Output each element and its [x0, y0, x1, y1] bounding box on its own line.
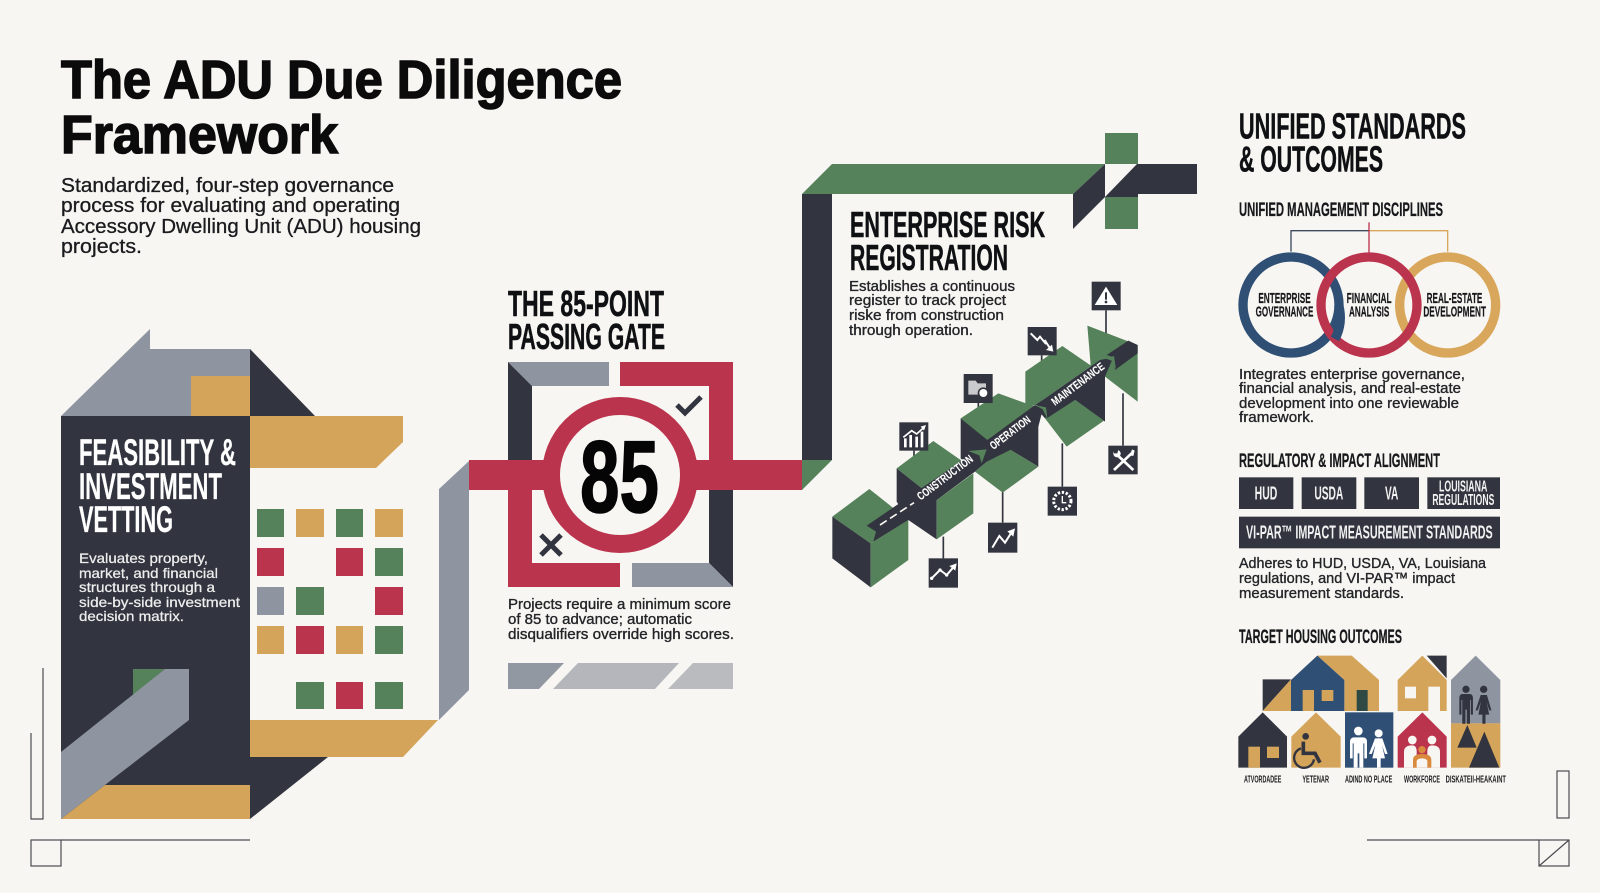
stems [914, 310, 1123, 558]
icon: folder search [964, 374, 993, 403]
end arrow [1087, 326, 1138, 402]
icon: check mark [677, 397, 701, 413]
enterprise description: register to track project [849, 292, 1007, 309]
venn diagram: management disciplines: GOVERNANCE [1256, 304, 1313, 320]
ribbon frame [802, 133, 1197, 460]
timeline ribbon: MAINTENANCE [1050, 361, 1107, 408]
step cube 3 [961, 393, 1038, 493]
feasibility description: market, and financial [79, 565, 218, 581]
timeline ribbon [867, 341, 1138, 542]
timeline ribbon: CONSTRUCTION [915, 453, 976, 503]
gate description: of 85 to advance; automatic [508, 611, 692, 628]
subtitle text block: Accessory Dwelling Unit (ADU) housing [61, 216, 421, 238]
icon: warning triangle [1092, 282, 1121, 310]
enterprise heading: REGISTRATION [850, 237, 1008, 278]
enterprise description: through operation. [849, 322, 973, 339]
enterprise heading [850, 204, 1045, 278]
panel: feasibility and investment vetting building [61, 329, 438, 819]
progress stripes [508, 663, 733, 689]
unified heading [1239, 106, 1466, 180]
regulatory badges: VA [1385, 482, 1398, 503]
icon: line chart [929, 558, 958, 588]
connector ribbon: grey to gate [439, 461, 469, 720]
unified heading: & OUTCOMES [1239, 138, 1383, 180]
disciplines description: framework. [1239, 409, 1314, 426]
panel: enterprise risk registration [802, 133, 1197, 588]
venn diagram: management disciplines: ENTERPRISE [1258, 291, 1311, 307]
outcome labels: ADIND NO PLACE [1345, 775, 1393, 786]
enterprise description [849, 278, 1015, 339]
subtitle text block: projects. [61, 236, 142, 258]
gate frame [469, 362, 832, 587]
disciplines description [1239, 366, 1465, 426]
venn diagram: management disciplines: FINANCIAL [1347, 291, 1392, 307]
feasibility heading: VETTING [79, 499, 173, 540]
gate description: Projects require a minimum score [508, 596, 731, 613]
icon: cross mark [541, 535, 561, 555]
outcome labels [1244, 775, 1506, 786]
timeline ribbon: OPERATION [988, 414, 1033, 452]
regulatory description [1239, 555, 1487, 602]
feasibility description: structures through a [79, 579, 215, 595]
outcome labels: YETENAR [1302, 775, 1329, 786]
regulatory description: regulations, and VI-PAR™ impact [1239, 570, 1456, 587]
outcome labels: DISKATEII-HEAKAINT [1446, 775, 1506, 786]
regulatory badges: LOUISIANA [1439, 479, 1487, 496]
regulatory description: Adheres to HUD, USDA, VA, Louisiana [1239, 555, 1487, 572]
feasibility description: decision matrix. [79, 608, 184, 624]
disciplines description: Integrates enterprise governance, [1239, 366, 1465, 383]
enterprise description: Establishes a continuous [849, 278, 1015, 295]
title: The ADU Due Diligence [61, 50, 622, 110]
feasibility heading: FEASIBILITY & [79, 432, 236, 473]
outcome labels: WORKFORCE [1404, 775, 1440, 786]
disciplines description: financial analysis, and real-estate [1239, 380, 1461, 397]
regulatory badges [1239, 477, 1500, 548]
isometric risk steps [832, 282, 1138, 588]
icon: wrench and screwdriver [1108, 446, 1138, 474]
gate description [508, 596, 734, 643]
gate heading: PASSING GATE [508, 316, 665, 357]
investment decision matrix [257, 509, 403, 709]
subtitle text block [61, 175, 421, 258]
building dark face [61, 416, 250, 819]
gate description: disqualifiers override high scores. [508, 626, 734, 643]
venn diagram: management disciplines: REAL-ESTATE [1427, 291, 1482, 307]
enterprise description: riske from construction [849, 307, 1004, 324]
feasibility heading [79, 432, 236, 540]
subtitle text block: process for evaluating and operating [61, 195, 400, 217]
title: Framework [61, 105, 339, 165]
gate heading [508, 283, 665, 357]
subtitle text block: Standardized, four-step governance [61, 175, 394, 197]
corner bracket: bottom left [31, 668, 250, 866]
step cube 2 [897, 441, 975, 539]
disciplines description: development into one reviewable [1239, 395, 1459, 412]
panel: unified standards and outcomes [1238, 106, 1506, 786]
venn diagram: management disciplines: ANALYSIS [1349, 304, 1389, 320]
step cube 1 [832, 489, 908, 587]
icon: falling trend [1028, 327, 1057, 355]
building roof [61, 329, 250, 416]
regulatory description: measurement standards. [1239, 585, 1404, 602]
regulatory badges: USDA [1314, 482, 1343, 503]
feasibility description: Evaluates property, [79, 550, 208, 566]
score circle with 85 [551, 406, 689, 544]
venn diagram: management disciplines: DEVELOPMENT [1423, 304, 1486, 320]
regulatory sub-heading: REGULATORY & IMPACT ALIGNMENT [1239, 451, 1440, 472]
icon: clock [1048, 487, 1077, 516]
icon: growth trend [988, 523, 1017, 553]
gate heading: THE 85-POINT [508, 283, 664, 324]
outcomes sub-heading: TARGET HOUSING OUTCOMES [1239, 627, 1402, 648]
regulatory badges: HUD [1255, 482, 1277, 503]
icon: rising bar chart [899, 422, 928, 451]
feasibility description [79, 550, 240, 624]
feasibility description: side-by-side investment [79, 594, 240, 610]
disciplines sub-heading: UNIFIED MANAGEMENT DISCIPLINES [1239, 200, 1443, 221]
regulatory badges: REGULATIONS [1432, 492, 1494, 509]
score circle with 85: 85 [580, 420, 659, 534]
title [61, 50, 622, 165]
step cube 4 [1025, 346, 1105, 447]
feasibility heading: INVESTMENT [79, 466, 222, 507]
outcome labels: ATVORDADEE [1244, 775, 1282, 786]
housing outcome icons [1238, 656, 1506, 786]
corner bracket: bottom right [1367, 771, 1569, 866]
panel: 85-point passing gate [469, 283, 832, 689]
venn diagram: management disciplines [1243, 222, 1496, 353]
enterprise heading: ENTERPRISE RISK [850, 204, 1045, 245]
